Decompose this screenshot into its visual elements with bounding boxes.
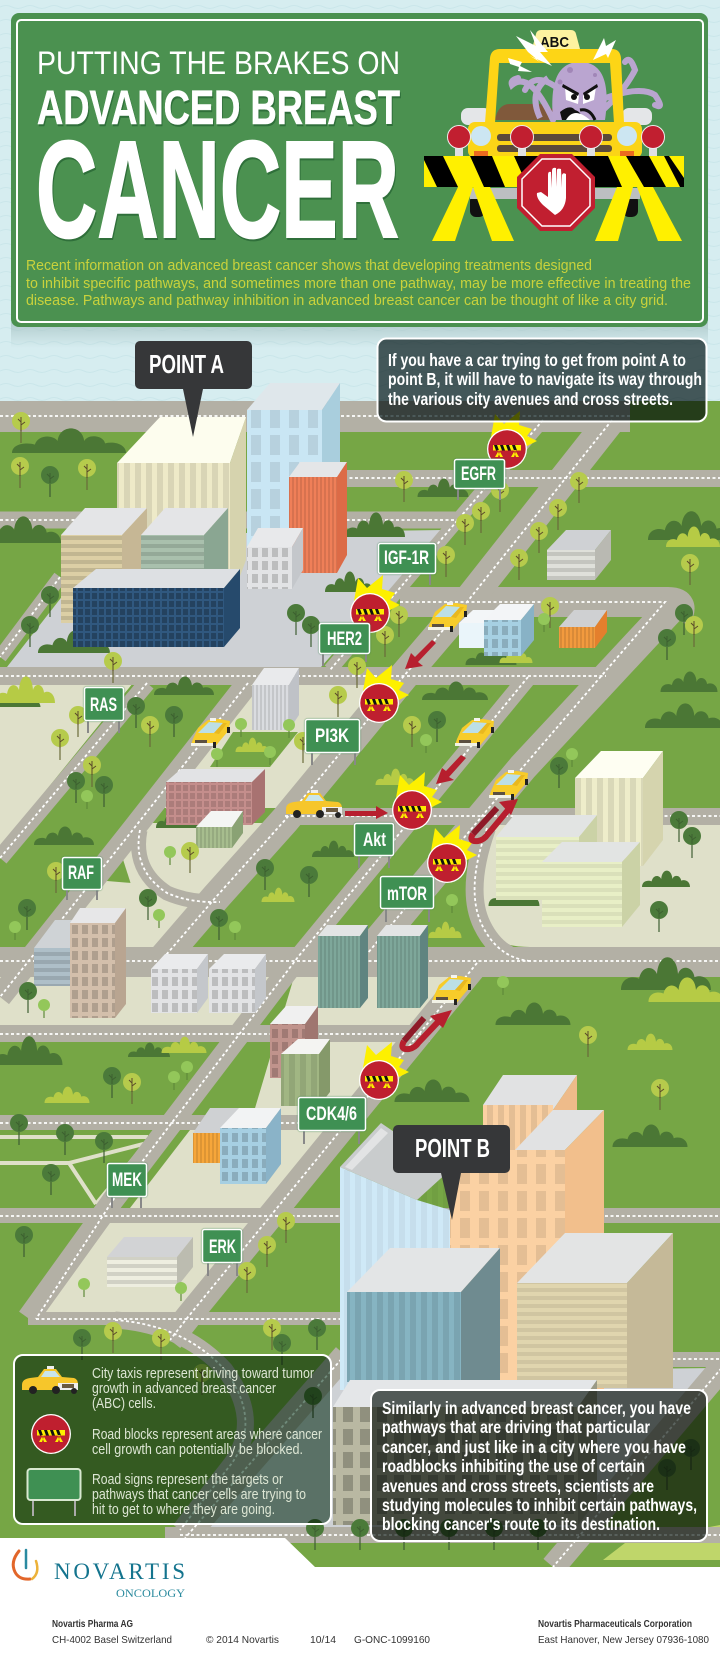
- logo: Novartis Oncology: ONCOLOGY: [116, 1586, 185, 1600]
- legend: taxi icon: [22, 1366, 78, 1394]
- cream building: [117, 417, 246, 603]
- footer white band: [0, 1538, 720, 1664]
- footer text: copyright and code: © 2014 Novartis: [206, 1634, 279, 1646]
- legend: road sign icon: [28, 1469, 80, 1516]
- road sign: HER2: [320, 624, 370, 666]
- roadblock: Akt: [392, 772, 442, 830]
- legend panel: [14, 1355, 331, 1524]
- grille: [497, 134, 612, 152]
- gray small building: [247, 528, 303, 589]
- taxi body: [468, 122, 642, 158]
- road sign: RAF: RAF: [68, 863, 94, 884]
- arrow: right toward Akt: [345, 806, 388, 819]
- glass tower: [340, 1123, 450, 1390]
- road sign: PI3K: PI3K: [315, 726, 349, 747]
- roadblock: CDK4/6: [359, 1042, 409, 1100]
- legend: taxi text: [92, 1366, 314, 1412]
- green block by gray building: [210, 732, 298, 767]
- road sign: CDK4/6: [298, 1098, 366, 1144]
- callout: advanced breast cancer explanation: blocking cancer's route to its destination.: [382, 1514, 660, 1534]
- arrow: down left toward Akt: [436, 755, 466, 784]
- illustration: taxi, cancer cell and roadblock: [424, 30, 684, 241]
- callout: advanced breast cancer explanation: [371, 1390, 707, 1541]
- tires: [470, 195, 638, 217]
- legend: taxi text: growth in advanced breast cancer: [92, 1381, 276, 1397]
- road sign: EGFR: EGFR: [461, 464, 496, 485]
- seat: [495, 104, 558, 120]
- intro text: Recent information on advanced breast cancer shows that developing treatments designed: [26, 257, 592, 274]
- road sign: RAS: [84, 688, 124, 733]
- trees: [9, 412, 703, 1550]
- tan tower: [517, 1233, 673, 1388]
- background: water: [0, 0, 720, 420]
- footer text: Novartis Pharma AG: [52, 1618, 172, 1646]
- road sign: CDK4/6: CDK4/6: [306, 1104, 357, 1125]
- footer text: copyright and code: 10/14: [310, 1634, 336, 1646]
- road sign: ERK: [202, 1230, 242, 1276]
- roadblock: EGFR: [487, 411, 537, 469]
- footer text: copyright and code: G-ONC-1099160: [354, 1634, 430, 1646]
- legend: road sign text: Road signs represent the targets or: [92, 1472, 283, 1488]
- road dashes: [0, 416, 720, 1567]
- road sign: RAS: RAS: [90, 695, 117, 716]
- barricade lamps: [448, 126, 664, 158]
- legend: taxi text: (ABC) cells.: [92, 1396, 156, 1412]
- gray lower building: [333, 1380, 597, 1525]
- legend: road sign text: hit to get to where they are going.: [92, 1502, 275, 1518]
- cab frame: [485, 49, 624, 123]
- peach tower: [450, 1075, 604, 1390]
- roadblock: HER2: [350, 575, 400, 633]
- header sign shadow: [11, 322, 708, 348]
- headlights: [471, 126, 637, 146]
- road sign: IGF-1R: IGF-1R: [384, 548, 429, 569]
- slate building: [347, 1248, 500, 1382]
- label: POINT B: POINT B: [415, 1133, 490, 1163]
- barricade bar: [424, 156, 684, 241]
- car taxis on road: [191, 602, 528, 1005]
- footer text: Novartis Pharmaceuticals Corporation: East Hanover, New Jersey 07936-1080: [538, 1634, 709, 1646]
- ground: [0, 401, 720, 1568]
- intro text: disease. Pathways and pathway inhibition in advanced breast cancer can be thought of like a city grid.: [26, 292, 668, 309]
- logo: Novartis Oncology: NOVARTIS: [54, 1559, 185, 1584]
- buildings: lower left blocks: [34, 908, 428, 1287]
- road sign: ERK: ERK: [209, 1237, 236, 1258]
- concrete blocks: [0, 683, 720, 1312]
- legend: road sign text: pathways that cancer cells are trying to: [92, 1487, 306, 1503]
- label: POINT A: POINT A: [149, 349, 224, 379]
- road sign: HER2: HER2: [327, 629, 362, 650]
- label: POINT B: [393, 1125, 510, 1220]
- arrows: [345, 640, 518, 1049]
- lightning bolts: [508, 30, 616, 72]
- legend: taxi text: City taxis represent driving toward tumor: [92, 1366, 314, 1382]
- taxi roof sign: [532, 30, 580, 51]
- roadblock: PI3K: [359, 665, 409, 723]
- arrow: U-turn near CDK4/6: [402, 1010, 452, 1049]
- road sign: MEK: MEK: [112, 1170, 142, 1191]
- legend: roadblock icon: [31, 1414, 71, 1454]
- legend: roadblock text: [92, 1427, 322, 1458]
- road sign: PI3K: [306, 720, 360, 765]
- lower plaza: [205, 1368, 716, 1530]
- callout: car from point A to point B: [378, 338, 706, 422]
- tan building: [61, 508, 147, 623]
- intro text: [26, 257, 691, 309]
- side mirrors: [461, 108, 652, 125]
- lime patch: [603, 1525, 720, 1560]
- logo: Novartis Oncology: [13, 1550, 185, 1600]
- octopus cell: [512, 60, 660, 120]
- arrow: U-turn near Akt: [471, 799, 518, 841]
- buildings: central blocks: [166, 530, 663, 927]
- road sign: MEK: [108, 1164, 146, 1208]
- taxi roof sign: ABC: [540, 34, 569, 51]
- road sign: IGF-1R: [378, 544, 436, 585]
- callout: advanced breast cancer explanation: avenues and cross streets, scientists are: [382, 1476, 654, 1496]
- roadblock: mTOR: [427, 825, 477, 883]
- buildings: Point A district: [61, 383, 347, 647]
- plaza: [7, 530, 443, 667]
- footer text: copyright and code: [206, 1634, 430, 1646]
- road sign: Akt: [354, 824, 394, 868]
- arrow: down left toward PI3K: [405, 640, 436, 669]
- road sign: EGFR: [454, 460, 504, 500]
- intro text: to inhibit specific pathways, and sometimes more than one pathway, may be more effective in treating the: [26, 275, 691, 292]
- orange tower: [289, 462, 347, 573]
- road sign: Akt: Akt: [363, 830, 386, 851]
- road sign: mTOR: mTOR: [387, 884, 427, 905]
- road sign: RAF: [62, 858, 102, 900]
- roads: [0, 416, 720, 1567]
- legend: road sign text: [92, 1472, 306, 1518]
- label: POINT A: [135, 341, 252, 437]
- footer text: Novartis Pharma AG: CH-4002 Basel Switzerland: [52, 1634, 172, 1646]
- road sign: mTOR: [380, 876, 434, 922]
- blue tower: [247, 383, 340, 570]
- stop sign with hand: [517, 154, 595, 231]
- callout: advanced breast cancer explanation: pathways that are driving that particular: [382, 1417, 650, 1437]
- legend: roadblock text: cell growth can potentially be blocked.: [92, 1442, 303, 1458]
- title line 1: PUTTING THE BRAKES ON: [37, 45, 400, 81]
- footer text: Novartis Pharma AG: Novartis Pharma AG: [52, 1618, 133, 1630]
- bushes: [0, 428, 720, 1147]
- title line 2: ADVANCED BREAST: [37, 82, 400, 135]
- city map: [0, 401, 720, 1568]
- buildings: Point B cluster: [333, 1075, 673, 1525]
- legend: roadblock text: Road blocks represent areas where cancer: [92, 1427, 322, 1443]
- callout: advanced breast cancer explanation: roadblocks inhibiting the use of certain: [382, 1456, 645, 1476]
- footer text: Novartis Pharmaceuticals Corporation: [538, 1618, 709, 1646]
- title line 3: CANCER: [36, 113, 399, 267]
- navy building: [73, 569, 240, 647]
- icon: flame: [13, 1550, 37, 1579]
- sage building: [141, 508, 228, 575]
- header sign panel: [11, 13, 708, 327]
